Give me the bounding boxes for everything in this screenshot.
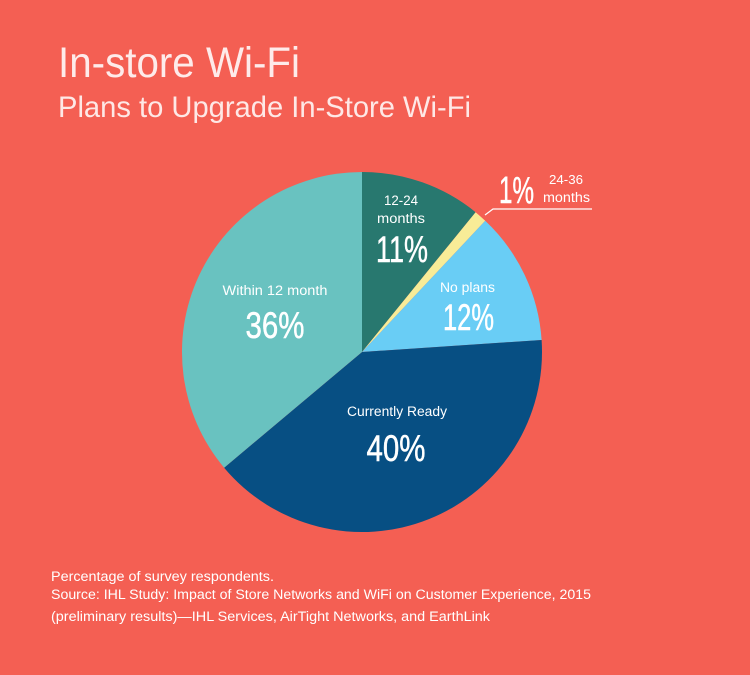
title: In-store Wi-Fi	[58, 39, 300, 87]
source note	[51, 569, 591, 624]
label: within 12 month: 36%	[246, 305, 304, 346]
label: within 12 month	[222, 283, 328, 346]
pie chart	[182, 172, 542, 532]
callout: 24-36 months: 1%	[499, 170, 534, 212]
subtitle: Plans to Upgrade In-Store Wi-Fi	[58, 91, 471, 124]
slice: currently ready	[224, 340, 542, 532]
label: no plans: No plans	[440, 280, 495, 295]
label: 12-24 months: 11%	[376, 229, 428, 270]
slice: within 12 month	[182, 172, 362, 468]
label: no plans	[440, 280, 495, 338]
source note: (preliminary results)—IHL Services, AirTight Networks, and EarthLink	[51, 609, 490, 624]
label: 12-24 months	[376, 193, 428, 270]
label: currently ready	[347, 404, 447, 469]
slice: no plans	[362, 221, 542, 352]
slice: 12-24 months	[362, 172, 476, 352]
source note: Source: IHL Study: Impact of Store Networks and WiFi on Customer Experience, 2015	[51, 587, 591, 602]
source note: Percentage of survey respondents.	[51, 569, 274, 584]
label: currently ready: Currently Ready	[347, 404, 447, 419]
label: currently ready: 40%	[366, 428, 426, 469]
label: 12-24 months: months	[377, 211, 425, 226]
callout: 24-36 months: 24-36	[549, 172, 583, 187]
callout: 24-36 months: months	[543, 190, 590, 205]
label: no plans: 12%	[443, 297, 494, 338]
label: within 12 month: Within 12 month	[222, 283, 328, 298]
callout: 24-36 months	[485, 170, 592, 215]
label: 12-24 months: 12-24	[384, 193, 418, 208]
slice: 24-36 months	[362, 212, 485, 352]
